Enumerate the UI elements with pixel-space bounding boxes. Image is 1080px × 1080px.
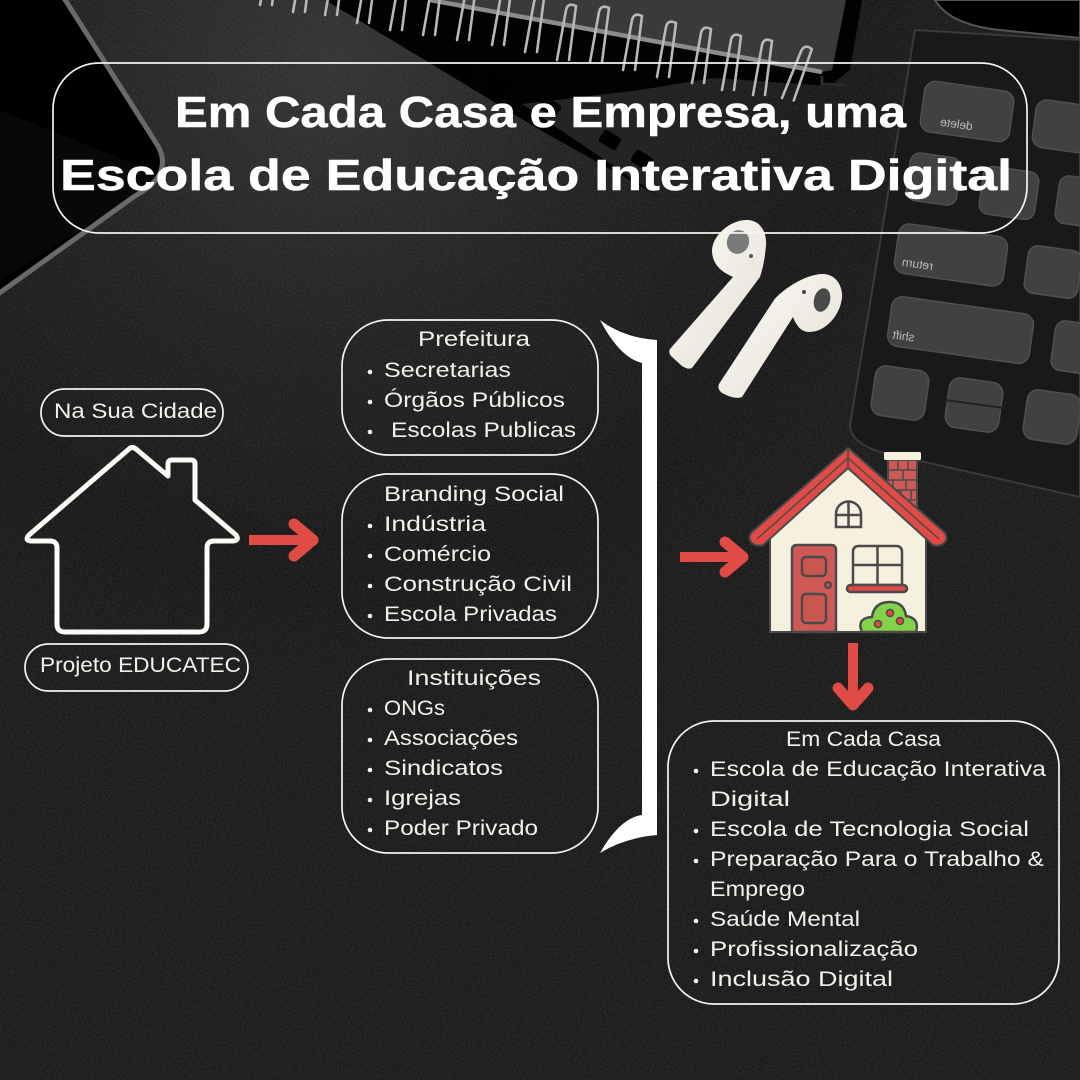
roof bbox=[750, 448, 946, 546]
arrow: house to list bbox=[838, 643, 868, 705]
panel: Prefeitura: Escolas Publicas bbox=[391, 419, 576, 442]
panel: Branding Social: Comércio bbox=[384, 543, 491, 566]
keyboard: shift bbox=[891, 327, 915, 345]
arrow: house outline to groups bbox=[249, 524, 313, 556]
title line 2: Escola de Educação Interativa Digital bbox=[60, 151, 1012, 200]
panel: Em Cada Casa: Inclusão Digital bbox=[710, 968, 893, 991]
bush bbox=[860, 602, 917, 632]
panel: Instituições: Poder Privado bbox=[384, 817, 538, 840]
attic window bbox=[836, 502, 861, 527]
panel: Em Cada Casa: Saúde Mental bbox=[710, 908, 860, 931]
keyboard: delete bbox=[939, 115, 974, 133]
panel: Instituições: Instituições bbox=[407, 667, 541, 690]
keyboard: return bbox=[901, 255, 934, 273]
pill: Projeto EDUCATEC bbox=[25, 644, 248, 691]
panel: Branding Social: Escola Privadas bbox=[384, 603, 557, 626]
pill: Projeto EDUCATEC: Projeto EDUCATEC bbox=[40, 654, 241, 677]
pill: Na Sua Cidade: Na Sua Cidade bbox=[54, 400, 217, 423]
pill: Na Sua Cidade bbox=[41, 389, 223, 436]
wall bbox=[770, 468, 926, 632]
panel: Instituições: ONGs bbox=[384, 697, 445, 720]
bracket bbox=[600, 320, 657, 853]
earbuds bbox=[669, 220, 842, 398]
panel: Branding Social: Branding Social bbox=[384, 483, 564, 506]
tablet corner bbox=[0, 0, 162, 294]
panel: Instituições: Associações bbox=[384, 727, 518, 750]
title line 1: Em Cada Casa e Empresa, uma bbox=[175, 88, 907, 137]
panel: Instituições bbox=[342, 659, 598, 853]
panel: Branding Social: Indústria bbox=[384, 513, 486, 536]
panel: Em Cada Casa: Escola de Educação Interativa bbox=[710, 758, 1046, 781]
panel: Em Cada Casa: Em Cada Casa bbox=[786, 728, 941, 751]
panel: Prefeitura: Secretarias bbox=[384, 359, 511, 382]
door bbox=[792, 545, 836, 632]
panel: Instituições: Sindicatos bbox=[384, 757, 503, 780]
panel: Em Cada Casa: Preparação Para o Trabalho & bbox=[710, 848, 1044, 871]
panel: Prefeitura: Órgãos Públicos bbox=[384, 389, 565, 412]
panel: Branding Social bbox=[342, 474, 598, 638]
panel: Em Cada Casa: Emprego bbox=[710, 878, 805, 901]
chimney bbox=[884, 452, 921, 510]
icon: house outline bbox=[27, 448, 237, 632]
keyboard bbox=[850, 0, 1080, 497]
icon: colored house bbox=[750, 448, 946, 632]
panel: Em Cada Casa: Escola de Tecnologia Social bbox=[710, 818, 1029, 841]
arrow: bracket to house bbox=[680, 542, 743, 572]
panel: Prefeitura bbox=[342, 320, 598, 455]
panel: Em Cada Casa: Digital bbox=[710, 788, 790, 811]
panel: Em Cada Casa bbox=[668, 721, 1059, 1004]
panel: Branding Social: Construção Civil bbox=[384, 573, 572, 596]
panel: Instituições: Igrejas bbox=[384, 787, 461, 810]
panel: Em Cada Casa: Profissionalização bbox=[710, 938, 918, 961]
panel: Prefeitura: Prefeitura bbox=[418, 328, 530, 351]
window bbox=[847, 546, 907, 592]
spiral notebook bbox=[260, 0, 862, 197]
title panel bbox=[53, 63, 1027, 233]
